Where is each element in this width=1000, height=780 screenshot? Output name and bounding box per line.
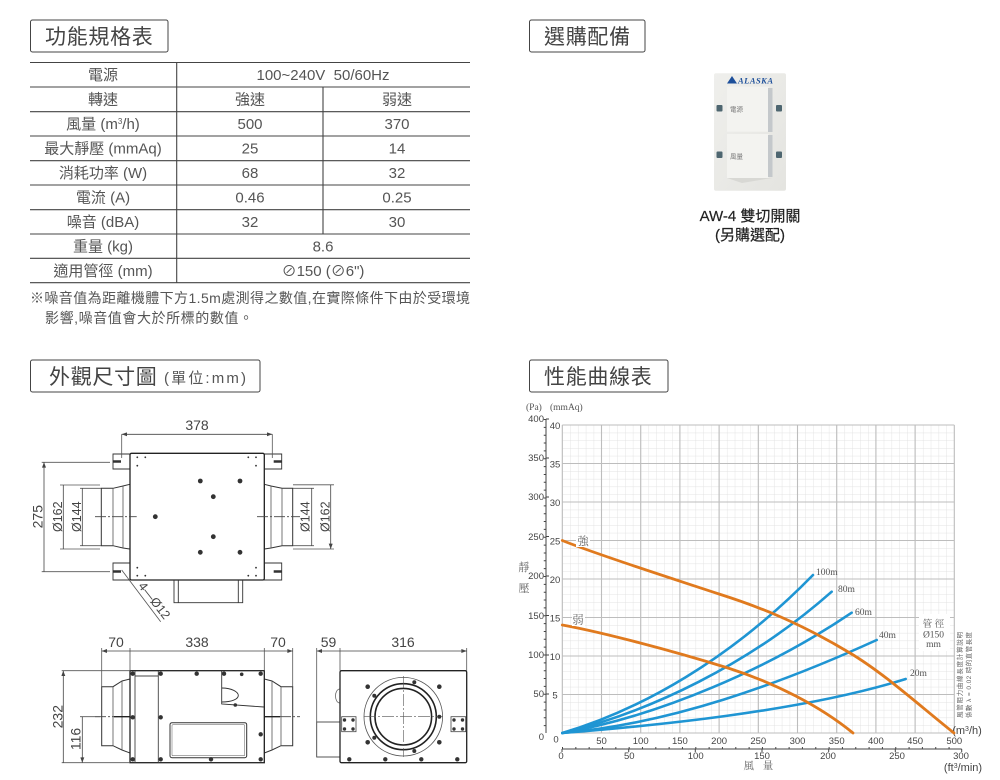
label: duct diameter: 管 徑: [923, 618, 945, 630]
panel: specification table: [30, 20, 470, 326]
axis: mmAq scale: 5: [552, 690, 558, 702]
table: 適用管徑 (mm): [53, 262, 153, 280]
unit label ft3/min: /min): [958, 762, 982, 774]
unit label m3/h: (m: [952, 725, 965, 737]
table: 重量 (kg): [73, 238, 133, 256]
table: 370: [384, 116, 410, 133]
footnote: ※噪音值為距離機體下方1.5m處測得之數值,在實際條件下由於受環境: [30, 290, 470, 306]
axis: pascal scale: 200: [528, 571, 544, 582]
axis: mmAq scale: 25: [550, 536, 560, 548]
table: 強速: [235, 92, 265, 108]
footnote: [30, 290, 470, 326]
dimension label: 338: [185, 634, 209, 650]
dimension label: 116: [68, 728, 84, 750]
axis units: (Pa): [526, 402, 542, 413]
dimension label: 232: [50, 705, 66, 728]
axis: pascal scale: 300: [528, 492, 544, 503]
dimension label: 59: [321, 634, 336, 650]
axis: pascal scale: 400: [528, 414, 544, 425]
label: duct diameter: [919, 614, 950, 651]
axis: pascal scale: 250: [528, 532, 544, 543]
table: 3: [118, 117, 123, 126]
heading: performance curves: 性能曲線表: [544, 366, 652, 389]
table: 噪音 (dBA): [67, 214, 139, 231]
axis title: static pressure: 壓: [518, 582, 530, 595]
caption: [700, 208, 800, 244]
table: ⊘150 (⊘6"): [282, 263, 364, 280]
dimension label: Ø162: [51, 501, 65, 532]
table: 32: [389, 165, 405, 182]
axis: pascal scale: 50: [533, 689, 544, 700]
drawing: front view: [50, 634, 300, 763]
axis: flow m3/h: 450: [907, 736, 923, 747]
panel: performance curves: [518, 360, 982, 774]
axis: flow m3/h: 400: [868, 736, 884, 747]
curve labels: 40m: [879, 631, 896, 641]
label: weak: 弱: [572, 614, 584, 626]
axis title: static pressure: 靜: [518, 560, 530, 574]
curve: 100m: [562, 575, 813, 733]
heading: performance curves: [530, 360, 668, 392]
note: calculation basis: 風管阻力曲線長度計算說明: [955, 632, 964, 718]
dimension label: 378: [185, 417, 209, 433]
dimension label: Ø162: [318, 501, 332, 532]
table: 消耗功率 (W): [59, 165, 147, 182]
axis: mmAq scale: 35: [550, 460, 560, 470]
table: 弱速: [382, 92, 412, 108]
logo: ALASKA: [737, 76, 773, 86]
heading: dimension drawings: [30, 360, 260, 392]
heading: dimension drawings: 外觀尺寸圖: [49, 366, 158, 389]
axis title: air volume: 量: [763, 760, 773, 772]
curve: 60m: [562, 613, 852, 733]
curves: fan speed: [562, 540, 954, 733]
note: calculation basis: [955, 632, 973, 718]
table: 電流 (A): [76, 190, 130, 206]
label: strong: 強: [577, 534, 589, 548]
table: 100~240V 50/60Hz: [256, 67, 390, 84]
axis: flow ft3/min: 50: [624, 751, 635, 762]
axis: flow m3/h: 150: [672, 736, 688, 747]
dimension label: 275: [29, 505, 45, 528]
curve: weak speed: [562, 625, 853, 733]
dimension label: Ø144: [298, 501, 312, 532]
drawing: top view: [29, 417, 334, 622]
table: 風量 (m: [66, 116, 118, 133]
table: 25: [242, 140, 258, 158]
axis: pascal scale: [528, 414, 549, 743]
curve: 20m: [562, 679, 906, 733]
axis: mmAq scale: 10: [550, 652, 560, 663]
note: calculation basis: 係數 λ = 0.02 時的直管長度: [964, 632, 973, 718]
heading: dimension drawings: (單位:mm): [164, 370, 246, 387]
axis: flow m3/h: 100: [633, 736, 649, 747]
caption: (另購選配): [715, 227, 785, 244]
axis units: [526, 402, 583, 413]
axis: flow m3/h: 250: [750, 736, 766, 747]
axis: pascal scale: 100: [528, 650, 544, 661]
axis: mmAq scale: 40: [550, 421, 560, 432]
table: 轉速: [88, 92, 118, 108]
table: 0.25: [382, 190, 412, 206]
axis: flow m3/h: 300: [790, 736, 805, 747]
axis: flow m3/h: 200: [711, 736, 727, 747]
unit label m3/h: /h): [969, 725, 982, 737]
axis: pascal scale: 150: [528, 611, 544, 622]
axis: flow ft3/min: 250: [889, 751, 905, 762]
heading: optional accessory: [530, 20, 645, 52]
axis title: static pressure: [518, 560, 530, 595]
axis: flow m3/h: 50: [596, 736, 607, 747]
panel: optional accessory: [530, 20, 800, 244]
table: 8.6: [313, 238, 333, 256]
axis title: air volume: 風: [743, 760, 754, 772]
axis: mmAq scale: 15: [550, 614, 560, 624]
unit label ft3/min: 3: [954, 763, 958, 770]
dimension label: 70: [270, 634, 286, 650]
curve labels: 100m: [816, 568, 838, 578]
axis: flow m3/h: 350: [829, 736, 845, 747]
curve: 80m: [562, 592, 832, 733]
table: 14: [389, 140, 405, 158]
icon: AW-4 wall switch: 風量: [730, 152, 744, 160]
unit label m3/h: 3: [965, 726, 969, 733]
axis: flow m3/h: 500: [946, 736, 962, 747]
axis: mmAq scale: 20: [550, 575, 560, 586]
footnote: 影響,噪音值會大於所標的數值。: [45, 310, 253, 326]
axis: flow ft3/min: [558, 748, 969, 762]
curve labels: 80m: [838, 585, 856, 595]
curve: strong speed: [562, 540, 954, 733]
dimension label: 316: [391, 634, 415, 650]
curve labels: 20m: [910, 669, 928, 679]
table: 68: [242, 165, 258, 182]
dimension label: Ø144: [70, 501, 84, 532]
caption: AW-4 雙切開關: [700, 208, 800, 225]
axis: pascal scale: 0: [539, 732, 544, 743]
axis: pascal scale: 350: [528, 453, 544, 464]
table: [30, 62, 470, 283]
label: duct diameter: Ø150: [923, 630, 944, 640]
axis: mmAq scale: 30: [550, 498, 560, 509]
dimension label: 4—Ø12: [135, 579, 173, 622]
axis: mmAq scale: [550, 421, 560, 746]
axis units: (mmAq): [550, 402, 583, 413]
table: /h): [122, 116, 140, 133]
axis: mmAq scale: 0: [553, 734, 559, 746]
dimension label: 70: [108, 634, 124, 650]
axis: flow ft3/min: 300: [953, 751, 969, 762]
drawing: side view: [317, 634, 467, 763]
axis: flow m3/h: [596, 736, 962, 747]
icon: AW-4 wall switch: [714, 73, 786, 191]
table: 電源: [88, 67, 118, 84]
unit label ft3/min: (ft: [944, 762, 954, 774]
table: 500: [237, 116, 263, 133]
heading: specification table: [30, 20, 168, 52]
axis: flow ft3/min: 0: [558, 751, 564, 762]
curve labels: [816, 568, 928, 679]
table: 30: [389, 214, 405, 231]
curves: duct length: [562, 575, 906, 733]
table: 0.46: [235, 190, 265, 206]
heading: specification table: 功能規格表: [45, 26, 154, 49]
heading: optional accessory: 選購配備: [544, 26, 631, 49]
label: duct diameter: mm: [926, 640, 941, 650]
table: 最大靜壓 (mmAq): [44, 140, 162, 158]
icon: AW-4 wall switch: 電源: [730, 104, 744, 114]
curve labels: 60m: [855, 608, 872, 618]
chart: performance curves: [518, 402, 982, 774]
axis: flow ft3/min: 200: [820, 751, 836, 762]
axis: flow ft3/min: 100: [688, 751, 704, 762]
axis title: air volume: [743, 760, 773, 772]
table: 32: [242, 214, 258, 231]
panel: dimension drawings: [29, 360, 467, 763]
curve: 40m: [562, 640, 877, 733]
axis: flow ft3/min: 150: [754, 751, 770, 762]
